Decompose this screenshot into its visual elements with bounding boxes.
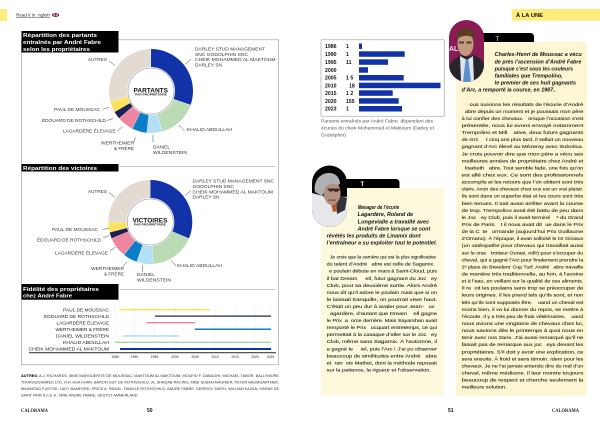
donut labels: victoires: WILDENSTEIN (137, 278, 171, 282)
donut labels: partants: KHALID ABDULLAH (187, 127, 232, 132)
heading: partants: selon les propriétaires (23, 47, 90, 53)
donut labels: victoires: AUTRES (88, 189, 107, 194)
panel: bar chart of runners (321, 40, 444, 116)
owner labels (28, 308, 110, 353)
body text: chevaux. Je ne l’ai jamais entendu dire du mal d’un (462, 363, 584, 369)
body text: nous avions une vingtaine de chevaux chez lui, (462, 321, 583, 327)
donut labels: victoires: LAGARDÈRE ÉLEVAGE (55, 249, 108, 255)
body text: meilleure solution. (462, 385, 507, 391)
heading: partants (22, 31, 118, 53)
body text: de trop. Trempolino avait été battu de peu dans (462, 208, 584, 214)
body text: le laissait tranquille, on pourrait viser haut. (327, 297, 437, 303)
body text: faisait pas de remarque aux joc eys devant les (462, 342, 584, 348)
body text: de manière très traditionnelle, au foin, à l’avoine (462, 271, 584, 277)
body text: nous dit qu’il adore le poulain mais que si on (327, 290, 437, 296)
footer: right page (448, 408, 579, 414)
footer: left page: CALORAMA (21, 409, 48, 414)
donut labels: partants: AUTRES (88, 57, 107, 62)
portrait: Roland de Longevialle (312, 165, 347, 228)
donut labels: partants: CHEIK MOHAMMED AL MAKTOUM (195, 57, 276, 62)
row labels: 18 (349, 83, 355, 89)
row labels: 2023 (325, 107, 337, 113)
black title tab: T (496, 37, 500, 43)
panel: Charles-Henri de Moussac interview (449, 20, 587, 396)
body text: accomplis et les retours que l’on obtient sont très (462, 180, 584, 186)
body text: nous savions dès le printemps à quoi nous en (462, 328, 584, 334)
row labels: 2000 (325, 68, 337, 74)
body text (462, 102, 584, 391)
portrait: Charles-Henri de Moussac: AL (449, 46, 459, 53)
body text: clairs. Avoir des chevaux chez eux est un vrai plaisir. (462, 187, 583, 193)
donut chart: partants (118, 58, 184, 124)
donut labels: partants (42, 46, 276, 155)
row labels: 2010 (325, 83, 337, 89)
body text: et à l’eau, en veillant sur la qualité de ces aliments. (462, 279, 583, 285)
body text: cheval, qui a gagné l’Arc pour finalement prendre la (462, 257, 584, 263)
donut labels: victoires: KHALID ABDULLAH (177, 263, 222, 268)
row labels: 1 (346, 107, 349, 113)
heading: partants: Répartition des partants (23, 33, 97, 39)
owner labels: PAUL DE MOUSSAC (63, 308, 110, 314)
donut labels: partants: ÉDOUARD DE ROTHSCHILD (42, 117, 107, 123)
intro text: Longevialle a travaillé avec (358, 219, 429, 225)
body text: gagnant d’Arc élevé au Mézeray avec Subotica. (462, 144, 583, 150)
donut labels: partants: DARLEY SN (195, 62, 222, 68)
bars (359, 44, 440, 112)
chart caption: Partants entraînés par André Fabre dépendant des (321, 118, 433, 123)
body text: Club, pour sa deuxième sortie. Alors André (327, 283, 437, 289)
body text: présentée, nous lui avons envoyé notamment (462, 123, 584, 129)
donut labels: victoires: GODOLPHIN SNC (192, 184, 235, 189)
body text: l’écoute. Il y a très peu de frais vétérinaires. uand (462, 314, 584, 320)
section tab: à la une: À LA UNE (516, 12, 544, 19)
row labels: 2020 (325, 99, 337, 105)
body text: bien tenues. Il sait aussi arrêter avant la course (462, 201, 584, 207)
intro text: puisque c’est sous les couleurs (494, 67, 573, 73)
year axis: 2015 (231, 355, 239, 359)
yellow page tab (0, 9, 7, 21)
body text: du talent d’André abre est celle de Sagamix. (327, 262, 435, 268)
heading: fidélité (22, 284, 276, 300)
body text: sera ensuite. À froid et sans témoin. Idem pour les (462, 355, 584, 362)
donut labels: partants: SNC GODOLPHIN SNC (195, 52, 249, 57)
intro text: André Fabre lorsque se sont (357, 226, 430, 232)
portrait: Charles-Henri de Moussac (449, 20, 484, 82)
intro text: Charles-Henri de Moussac a vécu (495, 52, 583, 58)
donut labels: partants: DANIEL (153, 144, 171, 150)
row labels (325, 44, 355, 113)
year axis: 2000 (171, 355, 179, 359)
chart caption: Godolphin) (321, 132, 347, 137)
row labels: 1995 (325, 60, 337, 66)
body text: beaucoup de similitudes entre André abre (327, 353, 437, 359)
body text: sur la patience, la rigueur et l’observation. (327, 367, 431, 373)
body text: il bat Dream ell, futur gagnant du Joc ey (327, 276, 438, 282)
body text: lisabeth abre. Tout semble fade, une fois qu’on (465, 165, 584, 171)
body text: Il re oit les poulains sans trop se préoccuper de (462, 286, 584, 292)
row labels: 1 (346, 52, 349, 58)
section tab: à la une (512, 9, 600, 21)
intro text: familiales que Trempolino, (495, 74, 563, 80)
owner labels: LAGARDÈRE ÉLEVAGE (56, 320, 109, 326)
body text: beaucoup de respect et cherche seulement la (462, 378, 584, 384)
donut labels: partants: PAUL DE MOUSSAC (54, 107, 101, 112)
year axis: 2005 (191, 355, 199, 359)
donut labels: victoires: DANIEL (137, 272, 156, 277)
intro text: le premier de ses huit gagnants (495, 81, 576, 87)
donut labels: victoires: WERTHEIMER (91, 266, 125, 271)
body text: Je crois que la carrière qui est la plus significative (330, 255, 436, 261)
footer: left page: 50 (147, 408, 153, 414)
panel: owners charts (22, 31, 278, 365)
body text (327, 255, 438, 373)
body text: moins bien, il va lui donner du repos, se mettre à (462, 307, 584, 313)
footnote: other owners: THOROUGHBRED LTD, H.H. AGA KHAN, BARON GUY DE ROTHSCHILD, AL SHAQAB RACING, MME SUSAN MAGNIER, PETER BAUMGARTNER, (21, 380, 279, 384)
body text: ous suivions les résultats de l’écurie d’André (470, 102, 584, 108)
body text: de Gr1 t cinq ans plus tard, il sellait un nouveau (462, 137, 584, 143)
year axis: 1985 (111, 355, 119, 359)
row labels: 1 5 (346, 76, 353, 82)
year axis: 2024 (267, 355, 274, 359)
donut labels: partants: DARLEY STUD MANAGEMENT (195, 46, 265, 52)
body text: (un ostéopathe pour chevaux qui travaillait aussi (462, 243, 583, 249)
gantt chart: owner loyalty (28, 304, 276, 359)
year axis (111, 355, 274, 359)
donut labels: victoires: CHEIK MOHAMMED AL MAKTOUM (192, 190, 273, 194)
body text: d’Ornano). À l’époque, il avait sollicité le Dr Giniaux (462, 235, 584, 242)
body text: sur le crac trotteur Ourasi, ndlr) pour s’occuper du (462, 250, 584, 256)
donut labels: victoires (37, 179, 275, 282)
row labels: 11 (346, 60, 352, 66)
intro text: Lagardère, Roland de (358, 212, 413, 218)
body text: a gagné le iel, puis l’Arc ! J’ai pu observer (327, 346, 437, 352)
intro text: de près l’ascension d’André Fabre (495, 59, 581, 65)
intro text: révélés les produits de Linamix dont (327, 234, 421, 240)
donut labels: partants: WILDENSTEIN (153, 150, 187, 155)
body text: tels qu’ils sont supposés être. uand un cheval est (462, 300, 584, 306)
row labels: 2005 (325, 76, 337, 82)
row labels: 155 (346, 99, 355, 105)
footnote: other owners (21, 374, 280, 398)
body text: meilleures années de propriétaire chez André et (462, 158, 584, 164)
footer: right page: 51 (448, 408, 454, 414)
black title tab: T (360, 182, 364, 188)
body text: leurs origines. Il les prend tels qu’ils sont, et non (462, 293, 584, 299)
body text: le Joc ey Club, puis il avait terminé ᵉ du Grand (462, 215, 584, 221)
owner labels: WERTHEIMER & FRÈRE (56, 326, 109, 333)
row labels: 1990 (325, 52, 337, 58)
body text: est allé chez eux. Ce sont des professionnels (462, 172, 584, 178)
intro text: l’entraîneur a su exploiter tout le potentiel. (327, 241, 437, 247)
owner labels: CHEIK MOHAMMED AL MAKTOUM (28, 347, 109, 353)
black title tab (340, 179, 400, 188)
year axis: 1995 (151, 355, 158, 359)
row labels: 1 2 (346, 91, 353, 97)
intro text (462, 52, 583, 94)
footnote: other owners: MAHMOUD FUSTOK, LADY BAMFORD, PRICE A. FAISAL, FAMILLE ROTHSCHILD, ANDRE FABRE, DERRICK SMITH, WILLIAM KAZAN, HARAS DE (21, 387, 280, 391)
year axis: 1990 (131, 355, 138, 359)
read in english link: Read it in nglish (16, 12, 50, 18)
body text: tenir avec nos 2ans. J’ai aussi remarqué qu’il ne (462, 335, 584, 341)
footer: left page (21, 408, 153, 414)
body text: agardère, d’autant que Dream ell gagne (330, 311, 437, 317)
body text: Je crois pouvoir dire que mon père a vécu ses (462, 151, 584, 157)
donut labels: partants: WERTHEIMER (101, 140, 135, 146)
owner labels: ÉDOUARD DE ROTHSCHILD (44, 313, 110, 320)
body text: Ils sont dans un superbe état et les cours sont très (462, 194, 584, 200)
row labels: 1 (346, 44, 349, 50)
owner labels: DANIEL WILDENSTEIN (56, 334, 110, 340)
donut labels: victoires: PAUL DE MOUSSAC (52, 227, 99, 232)
heading: fidélité: Fidélité des propriétaires (23, 287, 99, 293)
panel: Roland de Longevialle interview (312, 165, 444, 396)
year axis: 2020 (251, 355, 259, 359)
owner labels: KHALID ABDULLAH (63, 340, 110, 346)
donut chart: victoires: PAR PROPRIÉTAIRE (134, 222, 166, 227)
body text: et ran ois Mathet, dont la méthode reposait (327, 360, 438, 366)
donut labels: victoires: DARLEY STUD MANAGEMENT SNC (192, 179, 275, 184)
donut labels: victoires: & FRÈRE (104, 270, 124, 276)
year axis: 2010 (211, 355, 219, 359)
donut labels: partants: & FRÈRE (114, 145, 134, 151)
body text: abre depuis un moment et je poussais mon père (465, 109, 584, 115)
donut chart: victoires (117, 189, 183, 255)
body text: 2ᵉ place du Breeders’ Cup Turf. André abre travaille (462, 264, 584, 270)
heading: victoires: Répartition des victoires (23, 166, 97, 172)
intro text: d’Arc, a remporté la course, en 1987.. (462, 88, 556, 94)
body text: le Prix a orce derrière. Mais Sayarshan avait (327, 318, 438, 324)
body text: remporté le Prix ocquart entretemps, ce qui (327, 325, 437, 331)
donut labels: victoires: DARLEY SN (192, 195, 220, 200)
row labels: 1986 (325, 44, 337, 50)
donut labels: partants: LAGARDÈRE ÉLEVAGE (63, 128, 116, 134)
donut chart: partants: PARTANTS (134, 88, 169, 94)
footnote: other owners: AUTRES: A.J. RICHARDS, MME MARGUERITE DE MOUSSAC, MAKTOUM AL MAKTOUM, MOUFID F. DABAGHI, MICHAEL TABOR, BALLYMORE (21, 374, 280, 378)
body text: de la C te ormande (aujourd’hui Prix Guillaume (462, 229, 584, 235)
chart caption (321, 118, 435, 137)
heading: fidélité: chez André Fabre (23, 294, 72, 300)
donut labels: victoires: ÉDOUARD DE ROTHSCHILD (37, 236, 102, 242)
heading: partants: entraînés par André Fabre (23, 40, 101, 46)
black title tab (478, 33, 534, 43)
row labels: 2015 (325, 91, 337, 97)
body text: permettait à la casaque d’aller sur le Joc ey (327, 332, 438, 338)
footer: right page: CALORAMA (552, 409, 579, 414)
body text: e poulain débute en mars à Saint-Cloud, puis (329, 269, 438, 275)
body text: à lui confier des chevaux. orsque l’occasion s’est (462, 116, 584, 122)
body text: propriétaires. S’il doit y avoir une explication, ce (462, 349, 584, 355)
donut chart: partants: PAR PROPRIÉTAIRE (135, 92, 167, 97)
intro text: Manager de l’écurie (358, 205, 399, 211)
footnote: other owners: SAINT PAIR S.C.E.A., MME ANDRE FABRE, GESTUT AMMERLAND. (21, 394, 139, 398)
body text: Prix de Paris. t il nous avait dit ue dans le Prix (462, 222, 584, 228)
body text: cheval, même médiocre. Il leur montre toujours (462, 370, 584, 376)
body text: Trempolino et Mill ative, deux futurs gagnants (462, 130, 584, 136)
chart caption: écuries du cheik Mohammed Al Maktoum (Darley et (321, 125, 435, 130)
donut chart: victoires: VICTOIRES (132, 218, 168, 224)
intro text (327, 205, 437, 247)
timeline bars (115, 309, 271, 350)
body text: C’était un peu dur à avaler pour Jean- uc (327, 304, 435, 310)
heading: victoires (22, 164, 276, 172)
body text: Club, même sans Sagamix. À l’automne, il (327, 338, 437, 345)
